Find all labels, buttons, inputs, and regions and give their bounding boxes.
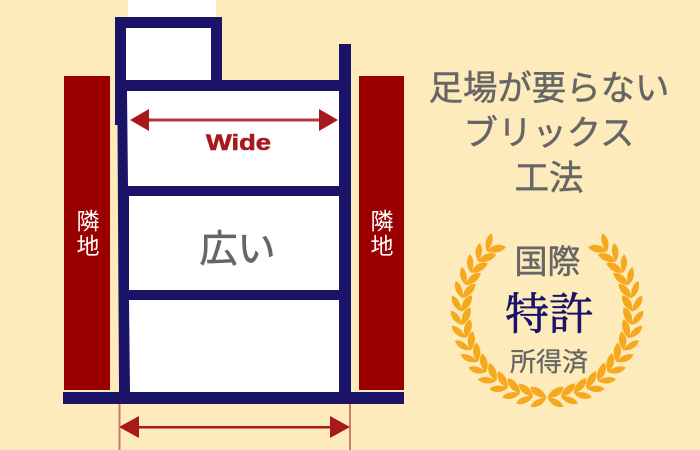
panel: left neighbouring plot [64, 76, 110, 390]
building frame [63, 17, 404, 404]
room openings [126, 28, 339, 392]
panel: right neighbouring plot [359, 76, 404, 390]
white sky strip above the building [128, 0, 216, 18]
badge text: 特許: 特許 [505, 290, 593, 339]
arrow: interior width [130, 109, 338, 131]
panel: right neighbouring plot: 隣 [370, 208, 394, 234]
heading: method name: ブリックス [464, 115, 634, 153]
heading: method name: 工法 [515, 160, 583, 198]
panel: left neighbouring plot: 地 [76, 233, 100, 259]
badge text: 所得済: 所得済 [510, 347, 588, 377]
heading: method name: 足場が要らない [429, 70, 669, 108]
arrow: building footprint width [118, 404, 351, 450]
heading: method name [429, 70, 669, 198]
panel: right neighbouring plot: 地 [370, 233, 394, 259]
label: 広い: 広い [199, 229, 276, 271]
badge text: 国際: 国際 [514, 243, 580, 280]
icon: laurel wreath [450, 232, 644, 408]
panel: left neighbouring plot: 隣 [76, 208, 100, 234]
building cross-section [63, 17, 404, 404]
badge: international patent wreath [450, 232, 644, 408]
label: Wide: Wide [206, 130, 271, 155]
